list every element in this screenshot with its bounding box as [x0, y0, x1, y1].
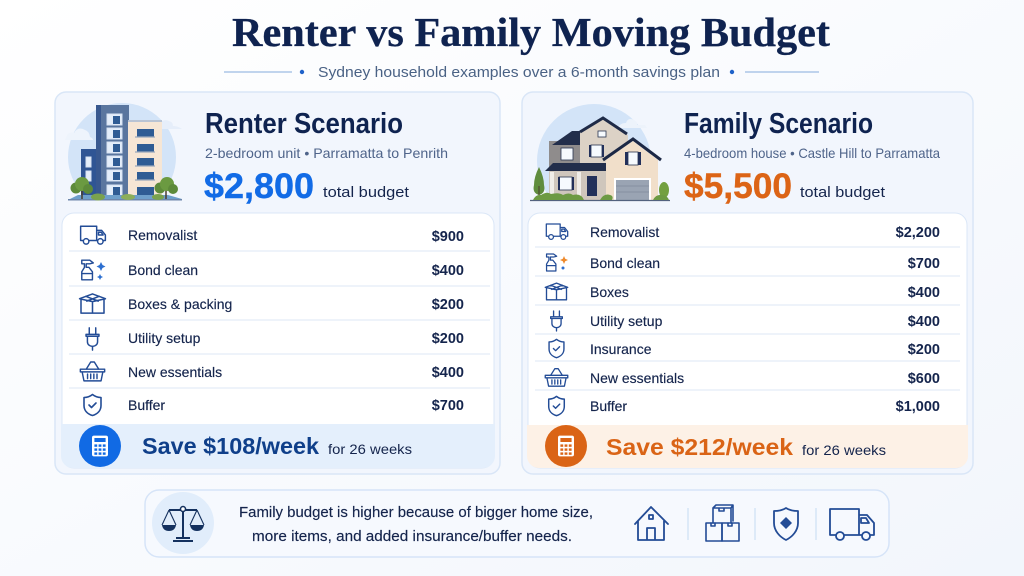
row: removalist: $900	[432, 229, 464, 245]
total budget	[204, 167, 410, 206]
icon: house	[635, 507, 668, 540]
row: new essentials	[545, 369, 940, 387]
total budget: total budget	[323, 184, 410, 201]
icon: balance scale	[152, 492, 214, 554]
row: buffer: Buffer	[128, 397, 165, 413]
title: Renter vs Family Moving Budget	[232, 9, 830, 55]
explanation text	[239, 505, 593, 545]
total budget	[684, 167, 886, 206]
heading: family scenario: Family Scenario	[684, 108, 873, 140]
row: boxes and packing: $200	[432, 297, 464, 313]
icon: shield	[774, 508, 798, 540]
savings band: renter: for 26 weeks	[328, 441, 412, 457]
row: boxes and packing: Boxes & packing	[128, 296, 232, 312]
row: utility setup: $400	[908, 314, 940, 330]
row: bond clean: Bond clean	[128, 262, 198, 278]
panel: renter scenario	[55, 92, 500, 474]
row: removalist	[546, 224, 940, 241]
subtitle: Sydney household examples over a 6-month savings plan	[318, 65, 720, 81]
row: new essentials	[80, 362, 464, 381]
row: new essentials: New essentials	[128, 364, 222, 380]
row: buffer: $700	[432, 398, 464, 414]
row: buffer	[84, 394, 464, 416]
panel: explanation callout	[145, 490, 889, 557]
row: insurance: $200	[908, 342, 940, 358]
total budget: total budget	[800, 184, 886, 201]
row: removalist: $2,200	[896, 225, 940, 241]
row: boxes	[545, 283, 940, 301]
total budget: $2,800	[204, 167, 314, 206]
savings band: family: Save $212/week	[606, 434, 794, 460]
row: buffer: Buffer	[590, 398, 627, 414]
row: buffer: $1,000	[896, 399, 940, 415]
row: insurance: Insurance	[590, 341, 652, 357]
illustration: apartment building	[68, 103, 182, 200]
row: boxes: Boxes	[590, 284, 629, 300]
row: removalist: Removalist	[128, 227, 197, 243]
total budget: $5,500	[684, 167, 792, 206]
row: utility setup	[551, 311, 940, 331]
heading: renter scenario: Renter Scenario	[205, 108, 403, 140]
route text: 4-bedroom house • Castle Hill to Parramatta	[684, 145, 940, 161]
explanation text: more items, and added insurance/buffer needs.	[252, 529, 572, 545]
row: bond clean	[82, 260, 464, 280]
row: new essentials: $600	[908, 371, 940, 387]
route text: 2-bedroom unit • Parramatta to Penrith	[205, 145, 448, 161]
row: utility setup: Utility setup	[590, 313, 663, 329]
budget table: renter	[62, 213, 494, 468]
subtitle	[224, 65, 819, 81]
row: new essentials: $400	[432, 365, 464, 381]
row: utility setup: $200	[432, 331, 464, 347]
panel: family scenario	[522, 92, 973, 474]
row: new essentials: New essentials	[590, 370, 684, 386]
row: removalist: Removalist	[590, 224, 659, 240]
row: utility setup	[86, 328, 464, 350]
row: bond clean: Bond clean	[590, 255, 660, 271]
row: bond clean: $700	[908, 256, 940, 272]
savings band: family	[527, 425, 968, 468]
row: insurance	[549, 339, 940, 358]
icon: stacked boxes	[706, 505, 739, 541]
row: bond clean: $400	[432, 263, 464, 279]
explanation text: Family budget is higher because of bigger home size,	[239, 505, 593, 521]
savings band: family: for 26 weeks	[802, 442, 886, 458]
savings band: renter	[61, 424, 495, 468]
row: boxes: $400	[908, 285, 940, 301]
row: boxes and packing	[80, 294, 464, 313]
illustration: family house	[530, 104, 670, 202]
icon: delivery truck	[830, 509, 874, 540]
row: bond clean	[547, 254, 940, 272]
row: removalist	[81, 226, 464, 245]
row: utility setup: Utility setup	[128, 330, 201, 346]
budget table: family	[528, 213, 967, 468]
row: buffer	[549, 396, 940, 416]
savings band: renter: Save $108/week	[142, 433, 319, 459]
